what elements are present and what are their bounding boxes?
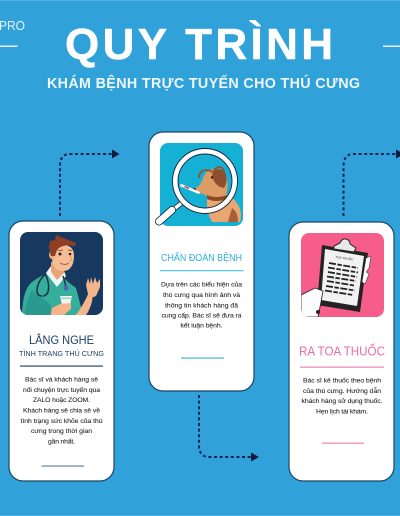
heading: RA TOA THUỐC xyxy=(299,344,385,358)
body text: Bác sĩ và khách hàng sẽ xyxy=(25,376,98,384)
panel: step 1 listen xyxy=(9,221,114,481)
header line right xyxy=(383,46,400,47)
panel: step 3 prescription xyxy=(289,222,394,481)
panel: step 2 diagnosis xyxy=(149,132,254,391)
rule xyxy=(300,366,384,368)
icon: prescription clipboard: TOA THUỐC xyxy=(335,254,355,262)
arrow: step 1 to step 2 xyxy=(60,150,120,216)
body text: ZALO hoặc ZOOM. xyxy=(33,397,90,404)
body text: kết luận bệnh. xyxy=(180,320,223,330)
title: QUY TRÌNH xyxy=(65,19,333,69)
body text: nối chuyện trực tuyến qua xyxy=(23,385,100,394)
icon: dog under magnifier xyxy=(159,143,243,226)
header line left xyxy=(0,46,18,47)
body text: Dựa trên các biểu hiện của xyxy=(161,280,242,288)
body text xyxy=(161,280,242,330)
body text: thông tin khách hàng đã xyxy=(165,302,238,310)
body text: cưng trong thời gian xyxy=(31,428,92,435)
subheading: TÌNH TRẠNG THÚ CƯNG xyxy=(19,349,104,358)
subtitle: KHÁM BỆNH TRỰC TUYẾN CHO THÚ CƯNG xyxy=(47,74,360,92)
body text: tình trạng sức khỏe của thú xyxy=(20,417,103,425)
heading: LẮNG NGHE xyxy=(29,332,94,347)
bottom rule xyxy=(322,442,364,444)
icon: prescription clipboard xyxy=(301,233,384,317)
body text: Bác sĩ kê thuốc theo bệnh xyxy=(303,376,381,384)
arrow: step 3 onward xyxy=(344,150,400,216)
body text: của thú cưng. Hướng dẫn xyxy=(303,386,381,395)
body text xyxy=(20,376,103,446)
body text: gần nhất. xyxy=(48,436,75,446)
bottom rule xyxy=(181,358,224,359)
heading: CHẨN ĐOÁN BỆNH xyxy=(161,251,242,264)
body text: Hẹn lịch tái khám. xyxy=(316,408,368,416)
body text: thú cưng qua hình ảnh và xyxy=(163,292,240,299)
body text: cung cấp. Bác sĩ sẽ đưa ra xyxy=(162,310,242,320)
icon: doctor xyxy=(20,232,103,318)
rule xyxy=(160,270,244,271)
arrow: step 2 to step 3 xyxy=(199,395,259,462)
rule xyxy=(20,366,103,367)
body text: Khách hàng sẽ chia sẻ về xyxy=(23,406,100,414)
body text: khách hàng sử dụng thuốc. xyxy=(302,396,383,405)
body text xyxy=(302,376,383,416)
bottom rule xyxy=(42,466,84,467)
